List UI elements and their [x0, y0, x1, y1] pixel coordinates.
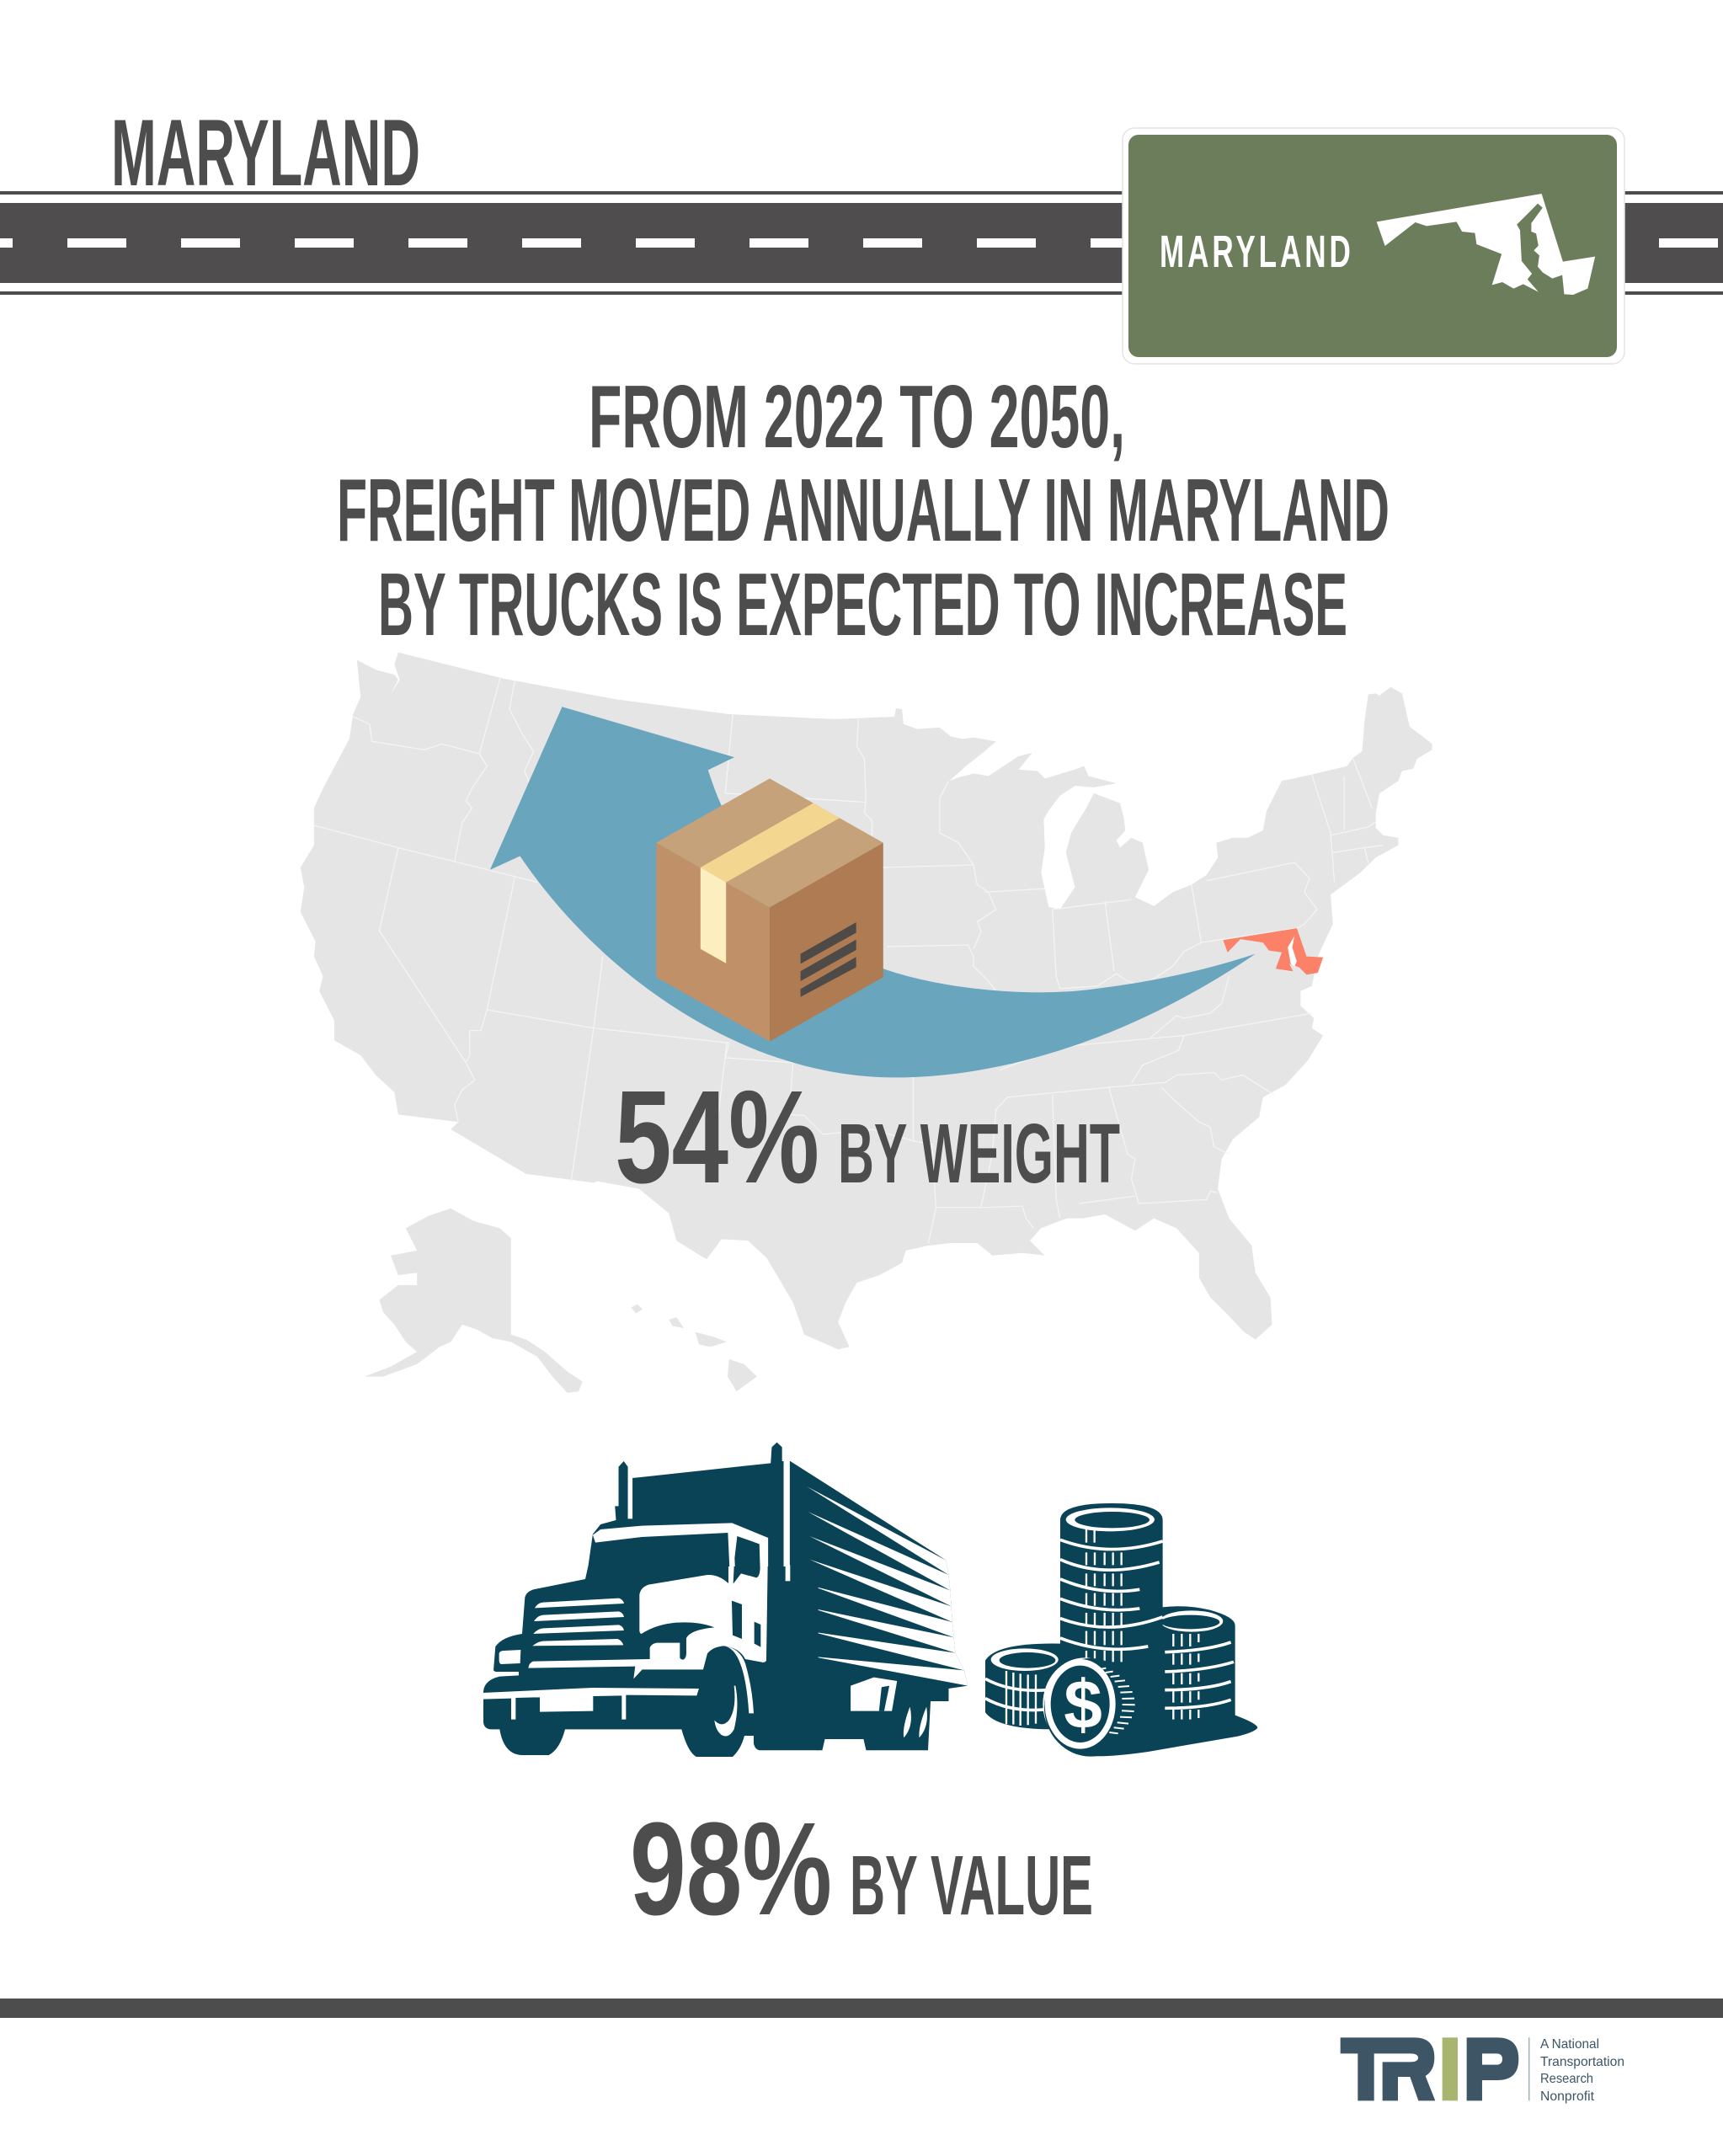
US map with arrow and box — [301, 653, 1432, 1393]
page title: MARYLAND — [111, 100, 420, 205]
road band — [0, 191, 1723, 295]
icon: coin stacks — [985, 1503, 1257, 1757]
contiguous US — [301, 653, 1432, 1349]
headline: FROM 2022 TO 2050, — [589, 367, 1125, 467]
statistic: by weight — [615, 1064, 1120, 1211]
statistic: by weight: 54% — [615, 1064, 819, 1211]
shadow — [1089, 1695, 1257, 1756]
state borders — [314, 677, 1384, 1243]
logo tagline — [1540, 2037, 1624, 2104]
left stack — [985, 1644, 1061, 1729]
center stack — [1060, 1503, 1163, 1718]
upper cab and trailer — [588, 1443, 968, 1750]
front coin — [1043, 1657, 1137, 1757]
Hawaii — [632, 1305, 757, 1391]
highway sign — [1123, 128, 1624, 364]
cardboard box — [656, 778, 883, 1042]
dollar sign: $ — [1064, 1667, 1102, 1743]
statistic: by weight: BY WEIGHT — [838, 1107, 1120, 1201]
Alaska — [365, 1209, 583, 1393]
logo tagline: Transportation — [1540, 2055, 1624, 2069]
statistic: by value: BY VALUE — [850, 1838, 1093, 1933]
lower cab, grille, bumper and front wheels — [483, 1565, 819, 1757]
TRIP logo — [1341, 2037, 1624, 2104]
sign label: MARYLAND — [1160, 226, 1354, 277]
icon: truck — [483, 1443, 968, 1757]
statistic: by value — [630, 1796, 1093, 1943]
headline — [337, 367, 1390, 654]
arrow — [490, 707, 1256, 1077]
right stack — [1160, 1606, 1235, 1720]
logo tagline: Nonprofit — [1540, 2089, 1595, 2104]
icon: Maryland state outline — [1377, 194, 1595, 295]
logo tagline: Research — [1540, 2072, 1593, 2086]
logo tagline: A National — [1540, 2037, 1599, 2052]
Maryland highlight — [1223, 928, 1323, 974]
statistic: by value: 98% — [630, 1796, 832, 1943]
footer bar — [0, 1999, 1723, 2018]
